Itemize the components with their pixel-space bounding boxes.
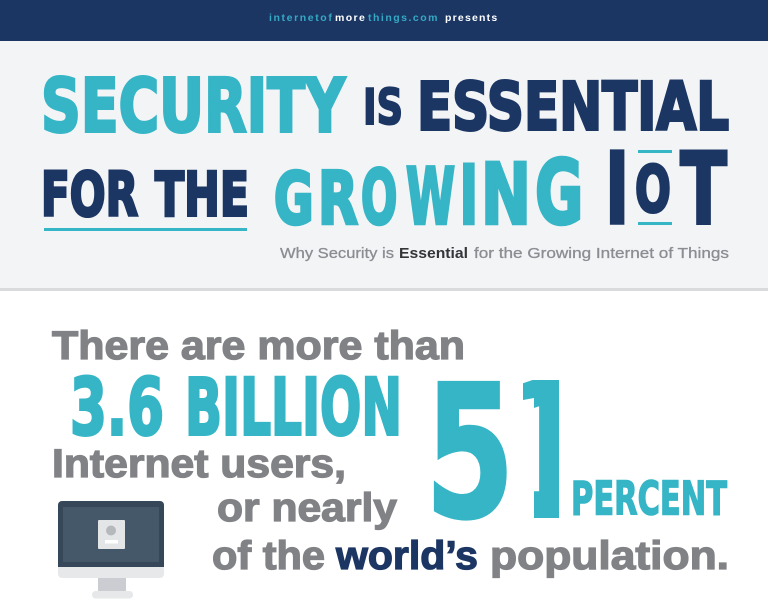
- icon: desktop monitor: [58, 501, 164, 598]
- text: or nearly: or nearly: [217, 486, 398, 530]
- title: growing: O: [361, 155, 397, 242]
- title: growing: [274, 141, 583, 245]
- title: growing: G: [535, 141, 583, 245]
- title: for the: FOR: [41, 160, 138, 230]
- subtitle: Essential: [399, 245, 468, 262]
- title: growing: W: [406, 151, 455, 242]
- text: of the world's population: of the: [212, 534, 325, 578]
- number: 51: [434, 380, 559, 521]
- text: of the world's population: [212, 534, 729, 578]
- title: iot: T: [680, 132, 727, 248]
- title: growing: I: [459, 148, 478, 243]
- title: growing: G: [274, 159, 314, 241]
- header site name: things.com: [368, 12, 439, 24]
- underline: [44, 228, 247, 231]
- text: there are more than: There are more than: [52, 324, 465, 368]
- title: growing: R: [318, 157, 358, 241]
- text: internet users: Internet users,: [52, 442, 346, 486]
- header site name: [269, 12, 498, 24]
- number: 3.6 billion: 3.6: [70, 364, 164, 454]
- title panel: [0, 41, 768, 291]
- title: iot: O: [635, 152, 671, 227]
- number: 51: 5: [425, 347, 515, 561]
- title: iot: I: [605, 133, 630, 248]
- subtitle: for the Growing Internet of Things: [474, 245, 729, 262]
- header site name: more: [335, 12, 366, 24]
- statistic panel: [52, 324, 729, 598]
- number: 3.6 billion: [70, 364, 402, 454]
- text: of the world's population: population.: [490, 534, 729, 578]
- header site name: internetof: [269, 12, 333, 24]
- title: security: SECURITY: [41, 64, 346, 150]
- title: for the: [41, 160, 249, 230]
- title: growing: N: [481, 146, 531, 244]
- title: for the: THE: [155, 160, 249, 230]
- title: iot: [604, 132, 727, 248]
- header site name: presents: [445, 12, 498, 24]
- title: is: IS: [363, 79, 403, 136]
- number: 3.6 billion: BILLION: [185, 364, 402, 454]
- number: 51: 1: [507, 343, 589, 564]
- text: of the world's population: world’s: [335, 534, 478, 578]
- subtitle: Why Security is: [280, 245, 394, 262]
- subtitle: [280, 245, 729, 262]
- header bar: [0, 0, 768, 41]
